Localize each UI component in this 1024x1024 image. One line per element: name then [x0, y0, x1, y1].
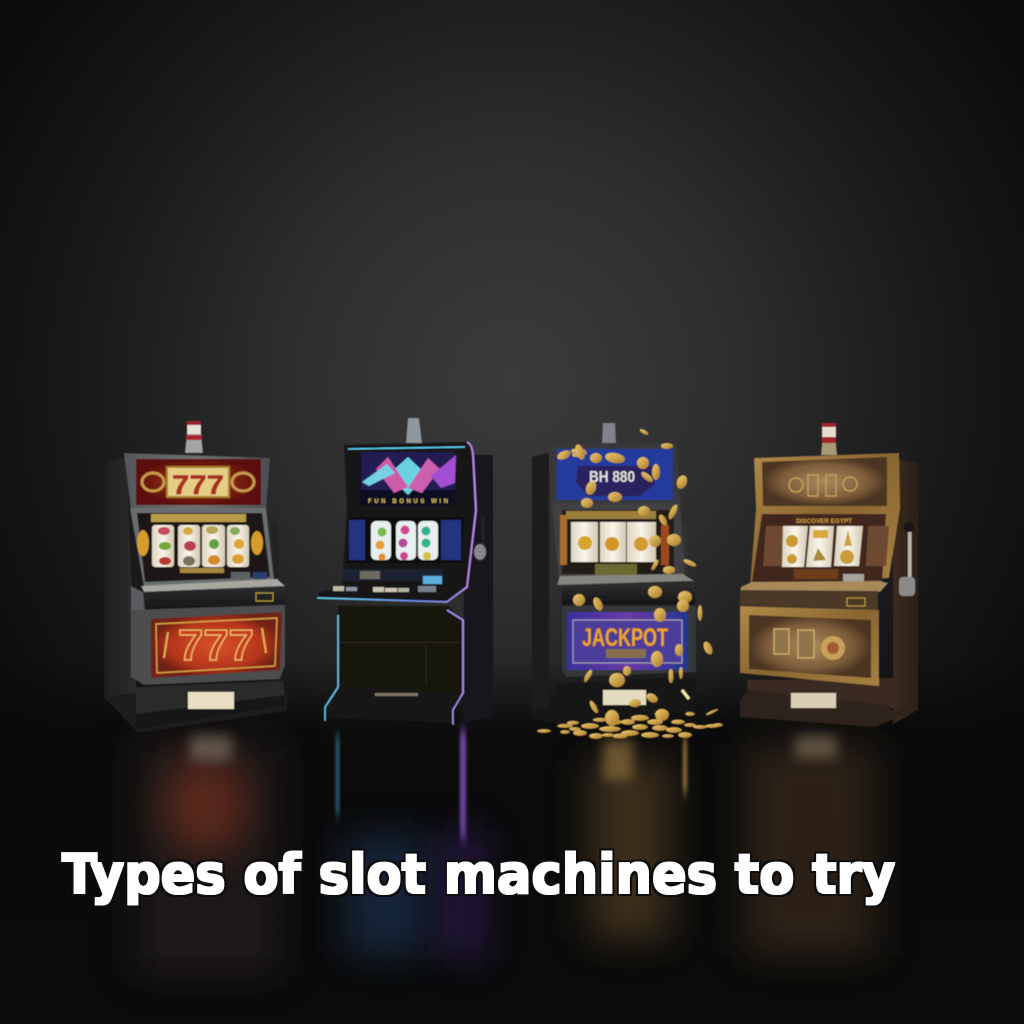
slot machine 1: classic red 777 — [104, 421, 287, 733]
falling coins — [556, 428, 715, 714]
beacon — [821, 423, 837, 455]
lower 777 panel — [131, 605, 285, 685]
lever — [474, 516, 486, 560]
top screen: BH 880 — [589, 469, 635, 486]
reel window: DISCOVER EGYPT — [796, 519, 852, 525]
beacon — [602, 423, 616, 443]
base — [531, 677, 695, 724]
neon outline — [317, 442, 476, 725]
top panel — [124, 453, 270, 510]
coin tray light — [188, 692, 234, 709]
lower 777 panel: 777 — [178, 621, 254, 670]
cabinet side and base — [740, 458, 918, 727]
top screen — [548, 443, 681, 503]
cabinet side — [463, 455, 493, 723]
reel window — [130, 508, 274, 587]
cabinet side — [532, 453, 549, 723]
jackpot panel — [562, 606, 696, 677]
cabinet side and base — [104, 458, 287, 733]
console — [333, 569, 443, 592]
lower cabinet — [327, 606, 463, 723]
coin tray light — [791, 693, 836, 708]
upper screen: FUN BONUS WIN — [368, 499, 448, 505]
beacon — [185, 421, 203, 453]
reel window — [752, 514, 889, 583]
beacon — [406, 418, 422, 443]
lower panel — [740, 606, 879, 686]
floor — [0, 660, 1024, 1024]
title: Types of slot machines to try — [62, 843, 895, 906]
jackpot panel: JACKPOT — [582, 624, 668, 652]
button deck — [740, 581, 888, 610]
reel display — [347, 517, 464, 563]
top panel: 777 — [172, 470, 224, 500]
coin pile — [537, 708, 723, 739]
button deck — [131, 579, 285, 612]
button deck — [557, 574, 695, 605]
slot machine 3: jackpot with coins — [531, 423, 723, 739]
lever — [272, 522, 279, 582]
lever — [684, 522, 687, 574]
slot machine 2: neon video slot — [317, 418, 493, 725]
floor reflections — [135, 730, 875, 975]
machine body — [317, 510, 476, 602]
upper screen — [344, 442, 476, 510]
slot machine 4: gold antique — [740, 423, 918, 727]
lever — [899, 522, 915, 596]
reel window — [552, 503, 686, 583]
top panel — [750, 453, 900, 586]
